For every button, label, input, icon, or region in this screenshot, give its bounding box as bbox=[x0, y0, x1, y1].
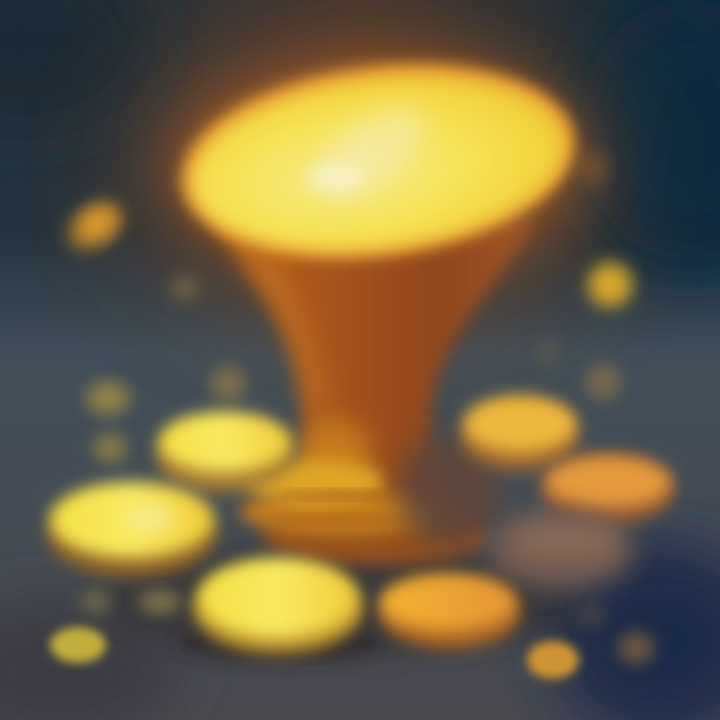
funnel body bbox=[212, 218, 535, 530]
stacked coins under funnel bbox=[263, 505, 487, 565]
small coins in the air bbox=[56, 150, 636, 462]
dark shaded right side bbox=[398, 432, 502, 548]
floor shadow bbox=[100, 545, 580, 655]
coin: upper left bbox=[157, 420, 293, 492]
coin: right orange bbox=[542, 456, 674, 524]
coin pile bbox=[48, 396, 674, 662]
rim centre highlight bbox=[304, 90, 440, 210]
coin: bottom centre large bbox=[178, 622, 378, 662]
funnel highlight bbox=[238, 250, 330, 410]
coin: left large bbox=[48, 493, 216, 577]
coin: upper right bbox=[462, 402, 578, 470]
small coins on the floor bbox=[50, 590, 654, 679]
funnel lower glow bbox=[299, 419, 371, 491]
coin: bottom orange bbox=[380, 580, 520, 648]
funnel bbox=[170, 43, 586, 530]
funnel rim bbox=[170, 43, 586, 279]
coin: faded brown bbox=[488, 514, 632, 590]
